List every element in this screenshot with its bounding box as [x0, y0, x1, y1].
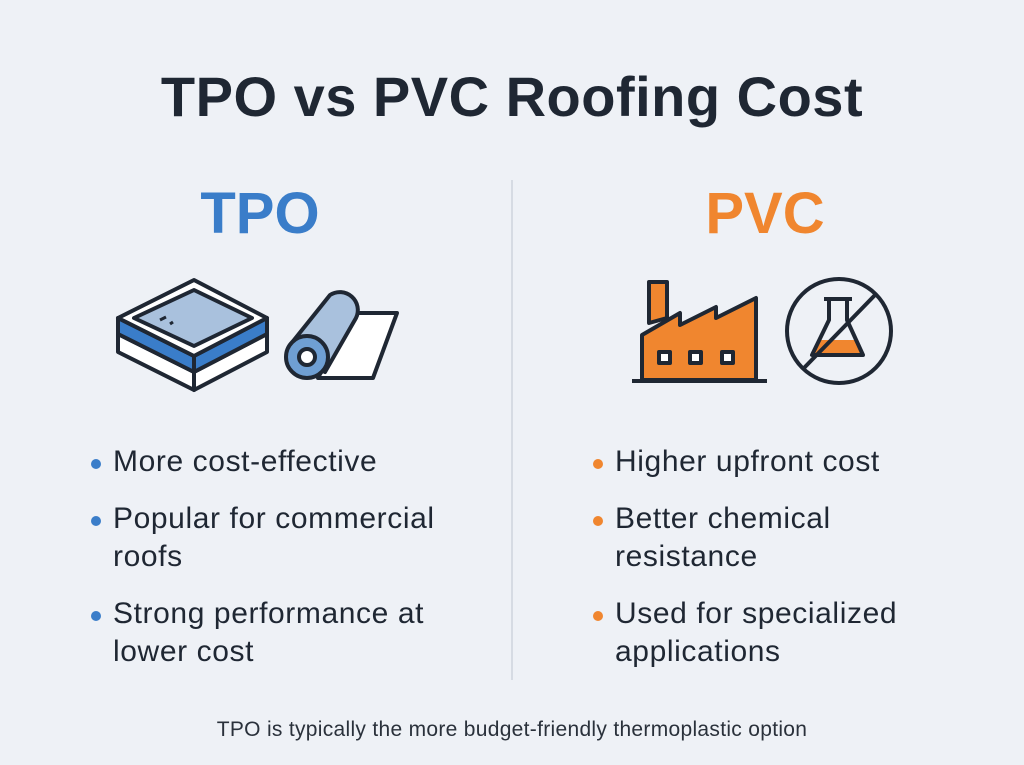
title: TPO vs PVC Roofing Cost: [161, 65, 863, 128]
TPO bullets: Popular for commercial roofs: [113, 502, 435, 573]
TPO bullets: More cost-effective: [113, 445, 377, 478]
heading: PVC: PVC: [705, 181, 825, 246]
icon: roll: [286, 292, 397, 378]
heading: TPO: TPO: [200, 181, 320, 246]
icon: no chemical: [787, 279, 891, 383]
TPO bullets: Strong performance at lower cost: [113, 597, 424, 668]
footer note: TPO is typically the more budget-friendly thermoplastic option: [217, 718, 807, 741]
TPO bullets: [91, 445, 435, 668]
PVC bullets: Higher upfront cost: [615, 445, 880, 478]
PVC bullets: [593, 445, 897, 668]
divider: [511, 180, 513, 680]
PVC bullets: Better chemical resistance: [615, 502, 831, 573]
icon: membrane box: [118, 280, 267, 390]
icon: factory: [632, 282, 767, 381]
PVC bullets: Used for specialized applications: [615, 597, 897, 668]
